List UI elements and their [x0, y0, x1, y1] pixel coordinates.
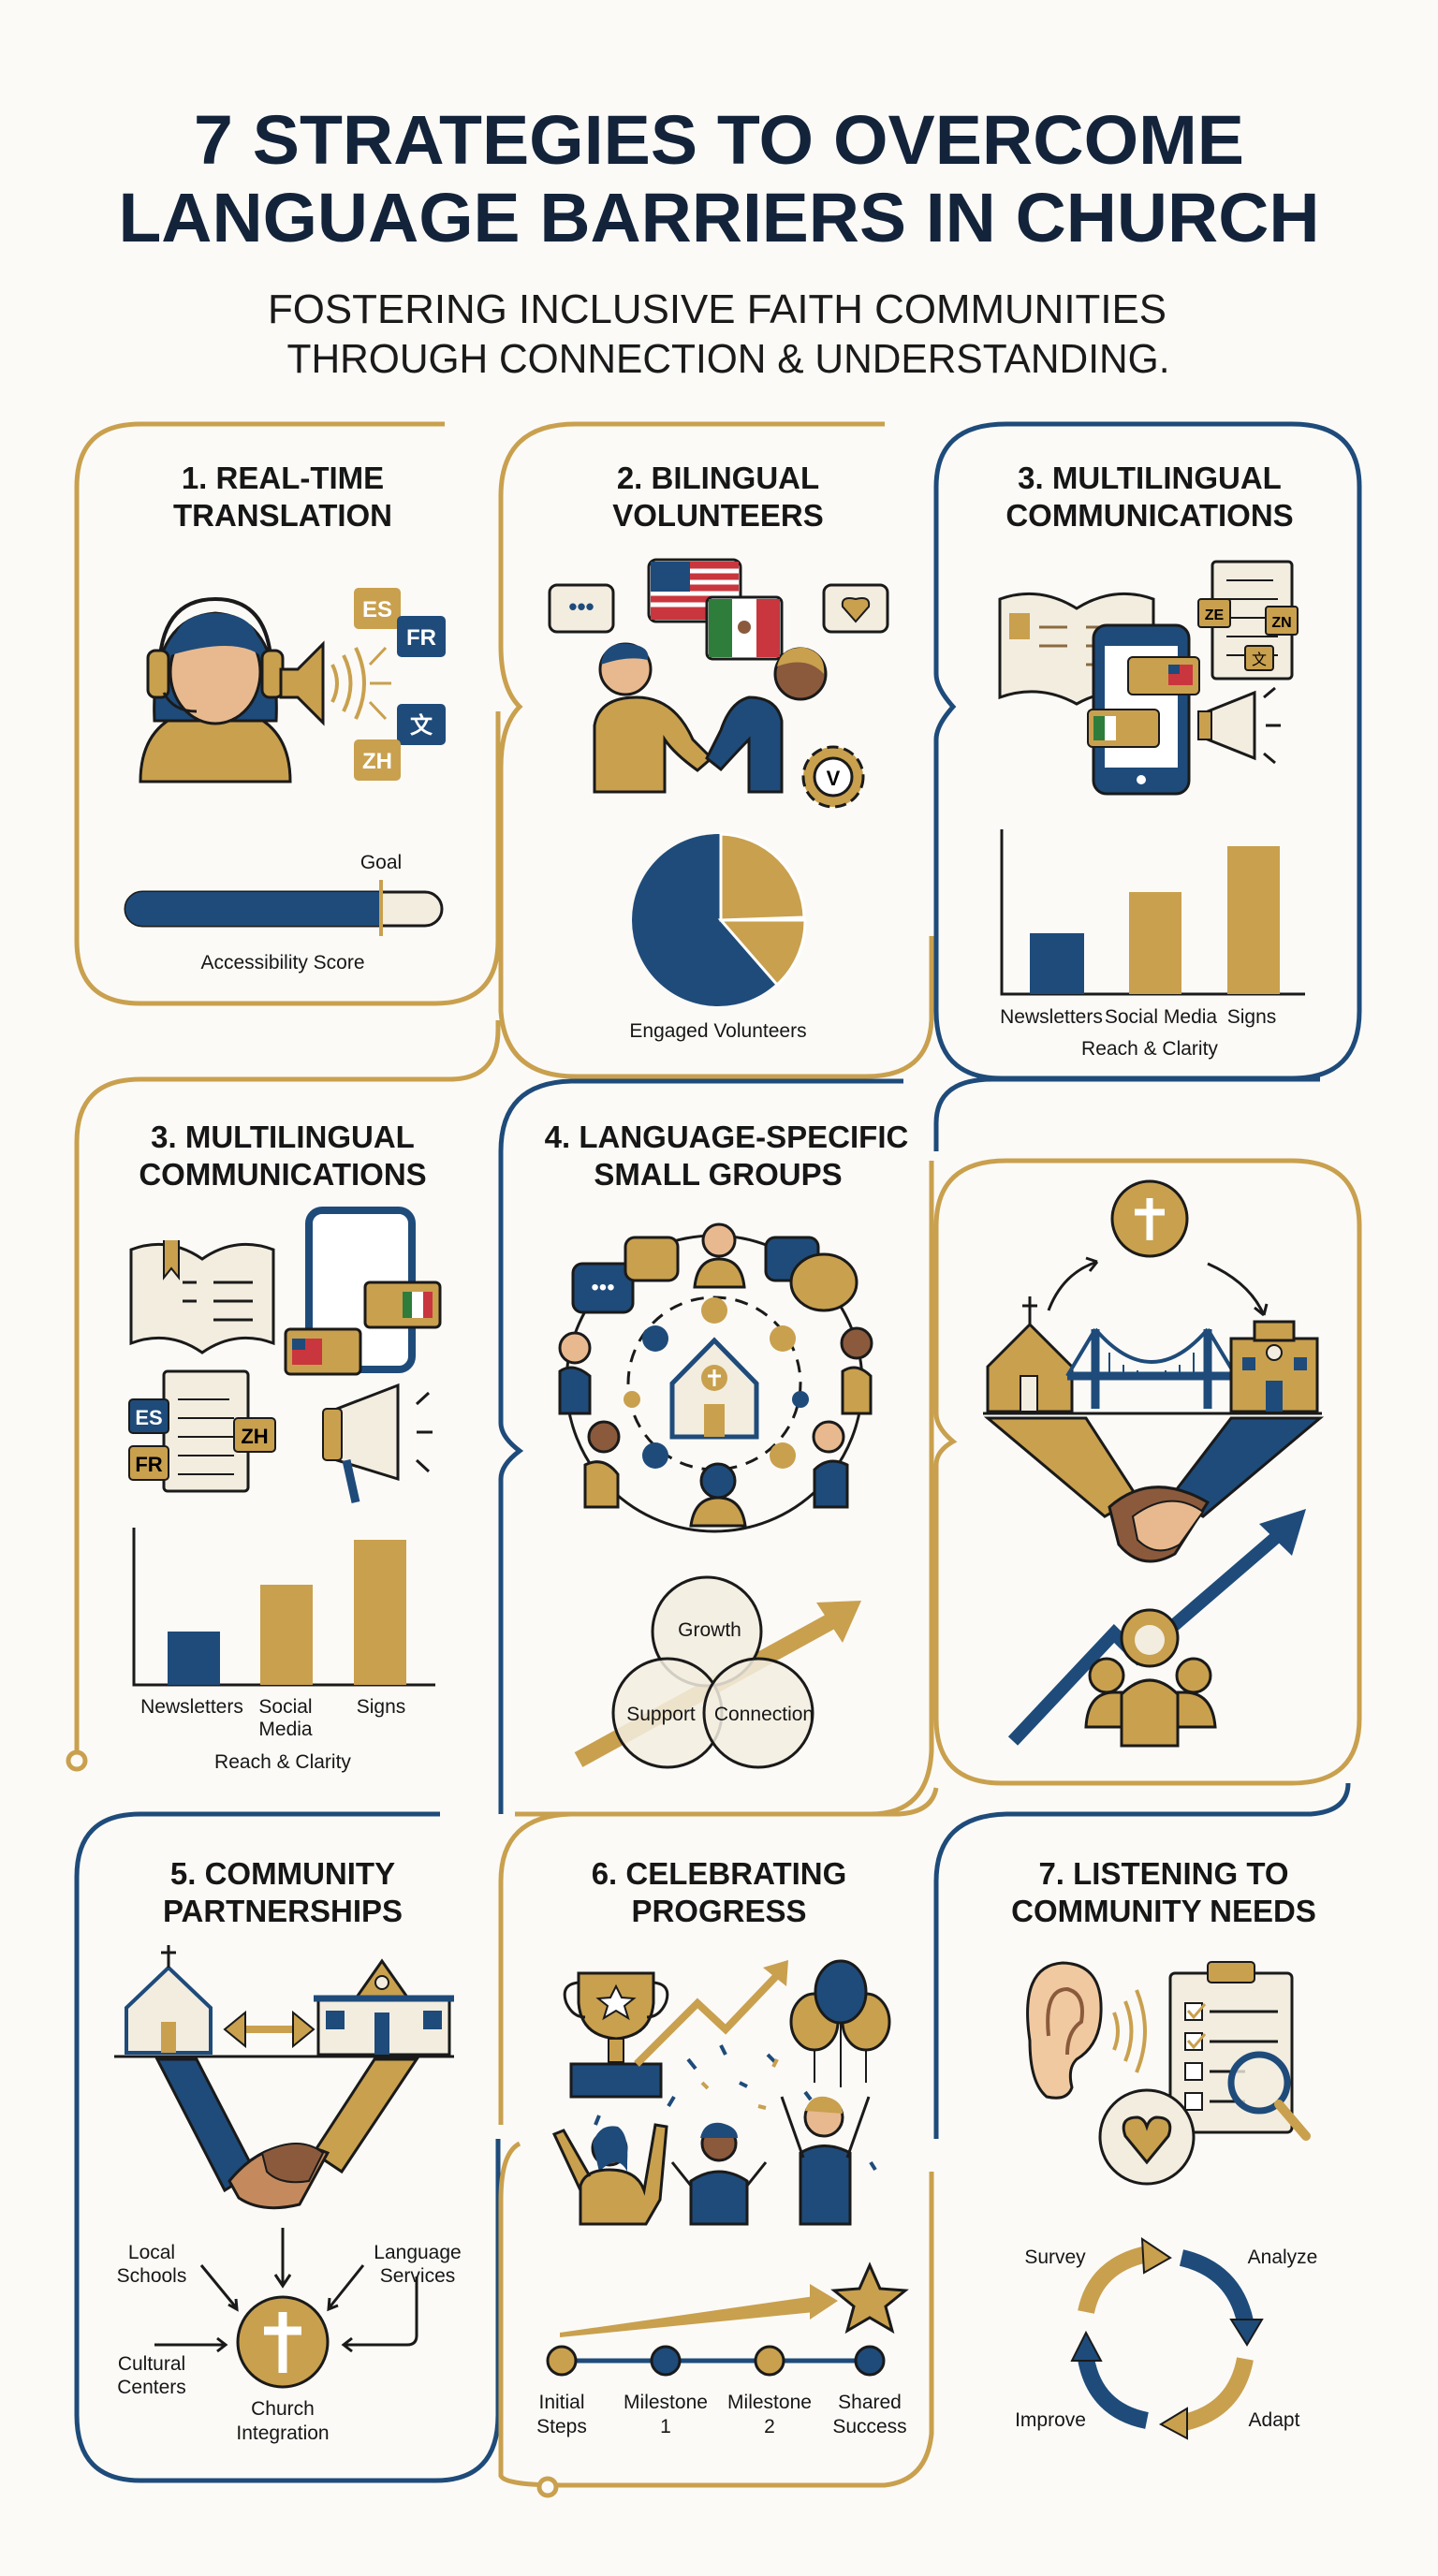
- heading: 4. LANGUAGE-SPECIFIC: [545, 1120, 908, 1154]
- bar chart: reach & clarity: Reach & Clarity: [1081, 1038, 1218, 1060]
- diagram: church integration: Schools: [117, 2265, 186, 2287]
- icon: speech bubbles with flags: [550, 560, 888, 659]
- icon: celebrating people and confetti: [554, 2045, 875, 2224]
- panel 5: community partnerships: [77, 1814, 498, 2481]
- icon: community circle around church house: •••: [591, 1275, 615, 1300]
- diagram: church integration: Cultural: [118, 2353, 185, 2375]
- icon: clipboard checklist with magnifier and heart: [1100, 1962, 1306, 2184]
- icon: book, phone, documents, megaphone: ZE: [1205, 607, 1225, 623]
- heading: TRANSLATION: [173, 498, 392, 533]
- icon: volunteers shaking hands: [594, 644, 863, 807]
- bar chart: reach & clarity: Social Media: [1105, 1006, 1217, 1028]
- venn diagram with growth arrow: Connection: [714, 1704, 814, 1725]
- icon: ear with sound waves: [1028, 1963, 1145, 2098]
- diagram: church integration: Church: [251, 2398, 315, 2420]
- timeline with star: 2: [764, 2416, 775, 2437]
- icon: book, phone, documents, megaphone: FR: [135, 1453, 163, 1476]
- title: 7 STRATEGIES TO OVERCOME: [194, 101, 1244, 179]
- heading: [163, 1856, 403, 1928]
- panel 2: bilingual volunteers: [501, 424, 932, 1076]
- cycle diagram: survey, analyze, adapt, improve: Adapt: [1249, 2409, 1300, 2431]
- icon: speech bubbles with flags: •••: [568, 593, 594, 621]
- pie chart: engaged volunteers: Engaged Volunteers: [629, 1020, 807, 1042]
- icon: trophy, rising arrow, balloons: [565, 1960, 889, 2097]
- cycle diagram: survey, analyze, adapt, improve: Survey: [1024, 2247, 1086, 2268]
- heading: COMMUNICATIONS: [1005, 498, 1294, 533]
- panel 4: language-specific small groups: [501, 1081, 932, 1814]
- icon: church and school linked by arrow: [114, 1945, 454, 2056]
- diagram: church integration: Centers: [117, 2377, 186, 2398]
- diagram: church integration: Local: [128, 2242, 175, 2263]
- icon: speaker and sound waves: [281, 644, 391, 723]
- title: LANGUAGE BARRIERS IN CHURCH: [118, 179, 1320, 256]
- bar chart: reach & clarity: [134, 1528, 435, 1773]
- heading: [545, 1120, 908, 1192]
- icon: book, phone, documents, megaphone: ZH: [241, 1425, 269, 1448]
- icon: language tags: ZH: [362, 749, 392, 774]
- bar chart: reach & clarity: Social: [258, 1696, 313, 1718]
- heading: [1011, 1856, 1316, 1928]
- timeline with star: Milestone: [624, 2392, 708, 2413]
- icon: book, phone, documents, megaphone: 文: [1252, 651, 1267, 668]
- cycle diagram: survey, analyze, adapt, improve: Improve: [1015, 2409, 1086, 2431]
- heading: [173, 461, 392, 533]
- timeline with star: Initial: [538, 2392, 585, 2413]
- timeline with star: Steps: [536, 2416, 587, 2437]
- cycle diagram: survey, analyze, adapt, improve: Analyze: [1248, 2247, 1317, 2268]
- heading: VOLUNTEERS: [612, 498, 824, 533]
- icon: book, phone, documents, megaphone: [129, 1210, 440, 1502]
- timeline with star: Success: [832, 2416, 907, 2437]
- icon: volunteers shaking hands: V: [827, 767, 841, 790]
- title: [118, 101, 1320, 256]
- bar chart: reach & clarity: Reach & Clarity: [214, 1751, 351, 1773]
- icon: book, phone, documents, megaphone: [1000, 562, 1298, 794]
- timeline with star: 1: [660, 2416, 671, 2437]
- heading: [592, 1856, 846, 1928]
- subtitle: [268, 286, 1170, 382]
- icon: handshake: [157, 2059, 417, 2208]
- heading: [139, 1120, 427, 1192]
- heading: 6. CELEBRATING: [592, 1856, 846, 1891]
- heading: [1005, 461, 1294, 533]
- subtitle: THROUGH CONNECTION & UNDERSTANDING.: [286, 336, 1170, 382]
- bar chart: reach & clarity: Newsletters: [1000, 1006, 1103, 1028]
- progress bar: accessibility score: Goal: [360, 852, 402, 873]
- heading: [612, 461, 824, 533]
- diagram: church integration: Integration: [236, 2422, 330, 2444]
- heading: 3. MULTILINGUAL: [1018, 461, 1282, 495]
- heading: COMMUNITY NEEDS: [1011, 1894, 1316, 1928]
- timeline with star: Shared: [838, 2392, 902, 2413]
- panel 3: multilingual communications (top): [936, 424, 1359, 1078]
- icon: book, phone, documents, megaphone: ZN: [1271, 615, 1292, 631]
- panel 7: listening to community needs: [936, 1783, 1348, 2438]
- icon: church, bridge, school: [983, 1296, 1322, 1413]
- diagram: church integration: Language: [374, 2242, 462, 2263]
- icon: language tags: FR: [406, 625, 436, 651]
- progress bar: accessibility score: [125, 852, 442, 973]
- icon: language tags: ES: [362, 597, 392, 622]
- venn diagram with growth arrow: [579, 1577, 861, 1767]
- bar chart: reach & clarity: Newsletters: [140, 1696, 243, 1718]
- venn diagram with growth arrow: Support: [626, 1704, 696, 1725]
- icon: community circle around church house: [560, 1224, 872, 1531]
- panel 1: real-time translation: [77, 424, 498, 1079]
- icon: book, phone, documents, megaphone: ES: [135, 1406, 163, 1429]
- icon: people with growth arrow: [1013, 1509, 1306, 1746]
- icon: handshake: [988, 1418, 1320, 1561]
- cycle diagram: survey, analyze, adapt, improve: [1015, 2239, 1317, 2438]
- icon: cross circle with arrows: [1049, 1181, 1267, 1315]
- timeline with star: [536, 2265, 907, 2437]
- panel: building bridges (middle right): [936, 1079, 1359, 1783]
- timeline with star: Milestone: [727, 2392, 812, 2413]
- bar chart: reach & clarity: [1000, 829, 1305, 1060]
- heading: PROGRESS: [631, 1894, 807, 1928]
- panel: multilingual communications (middle): [68, 1079, 451, 1773]
- bar chart: reach & clarity: Signs: [1227, 1006, 1276, 1028]
- icon: language tags: 文: [410, 712, 433, 739]
- heading: 1. REAL-TIME: [182, 461, 384, 495]
- panel 6: celebrating progress: [501, 1788, 936, 2496]
- heading: 5. COMMUNITY: [170, 1856, 395, 1891]
- progress bar: accessibility score: Accessibility Score: [200, 952, 365, 973]
- subtitle: FOSTERING INCLUSIVE FAITH COMMUNITIES: [268, 286, 1167, 332]
- bar chart: reach & clarity: Media: [258, 1719, 313, 1740]
- heading: COMMUNICATIONS: [139, 1157, 427, 1192]
- bar chart: reach & clarity: Signs: [357, 1696, 405, 1718]
- diagram: church integration: [117, 2228, 462, 2444]
- venn diagram with growth arrow: Growth: [678, 1619, 741, 1641]
- icon: woman with headset: [140, 599, 290, 782]
- heading: 7. LISTENING TO: [1038, 1856, 1289, 1891]
- heading: PARTNERSHIPS: [163, 1894, 403, 1928]
- heading: 3. MULTILINGUAL: [151, 1120, 415, 1154]
- heading: SMALL GROUPS: [594, 1157, 843, 1192]
- icon: language tags: [354, 588, 446, 781]
- pie chart: engaged volunteers: [629, 834, 807, 1042]
- diagram: church integration: Services: [380, 2265, 455, 2287]
- heading: 2. BILINGUAL: [617, 461, 819, 495]
